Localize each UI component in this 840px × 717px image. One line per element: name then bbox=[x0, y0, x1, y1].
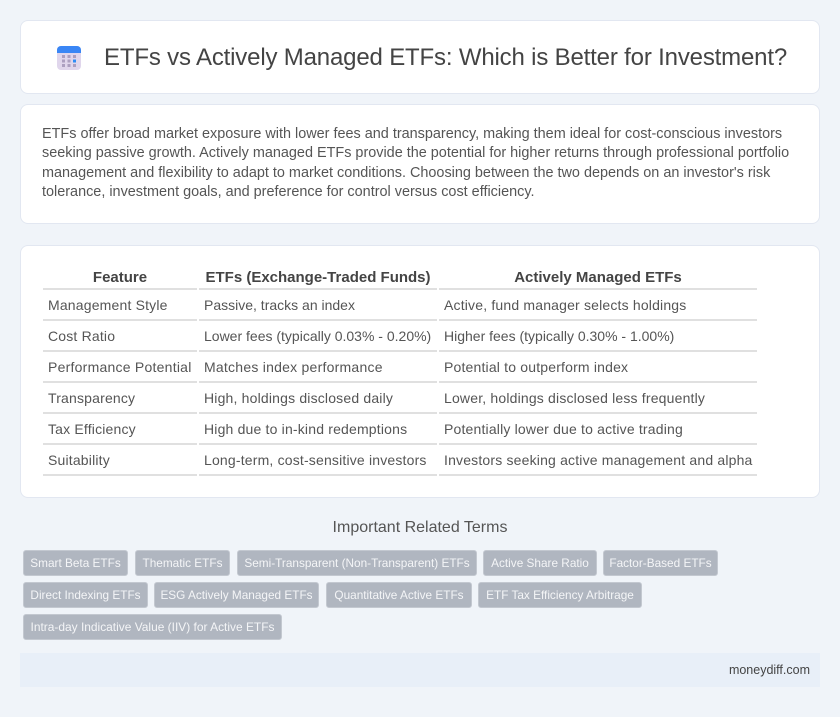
table header row: Actively Managed ETFs bbox=[514, 269, 682, 286]
table header row: Feature bbox=[93, 269, 147, 286]
tag: Quantitative Active ETFs bbox=[334, 588, 464, 602]
tag bbox=[135, 550, 230, 576]
tag bbox=[237, 550, 477, 576]
intro paragraph: management and flexibility to adapt to market conditions. Choosing between the two depends on an investor's risk bbox=[42, 165, 770, 181]
row: management style: Active, fund manager selects holdings bbox=[444, 297, 686, 313]
row: management style bbox=[48, 297, 686, 313]
related terms tags bbox=[23, 550, 718, 640]
icon: calendar bbox=[57, 46, 81, 70]
tag: Semi-Transparent (Non-Transparent) ETFs bbox=[244, 556, 470, 570]
intro text panel bbox=[20, 104, 820, 224]
row: suitability: Suitability bbox=[48, 452, 110, 468]
row: cost ratio: Lower fees (typically 0.03% - 0.20%) bbox=[204, 328, 431, 344]
tag: Direct Indexing ETFs bbox=[30, 588, 141, 602]
tag: ESG Actively Managed ETFs bbox=[160, 588, 313, 602]
intro paragraph: ETFs offer broad market exposure with lower fees and transparency, making them ideal for cost-conscious investors bbox=[42, 126, 782, 142]
header panel bbox=[20, 20, 820, 94]
row: transparency: High, holdings disclosed daily bbox=[204, 390, 393, 406]
tag: Thematic ETFs bbox=[142, 556, 222, 570]
table header row: ETFs (Exchange-Traded Funds) bbox=[205, 269, 431, 286]
tag bbox=[23, 550, 128, 576]
tag bbox=[23, 582, 148, 608]
related terms heading: Important Related Terms bbox=[333, 519, 507, 536]
comparison table panel bbox=[20, 245, 820, 498]
intro paragraph: tolerance, investment goals, and preference for control versus cost efficiency. bbox=[42, 184, 534, 200]
row: transparency: Transparency bbox=[48, 390, 135, 406]
intro paragraph: seeking passive growth. Actively managed ETFs provide the potential for higher returns through professional portfolio bbox=[42, 145, 789, 161]
row: tax efficiency: Tax Efficiency bbox=[48, 421, 136, 437]
row: tax efficiency bbox=[48, 421, 683, 437]
row: cost ratio: Cost Ratio bbox=[48, 328, 115, 344]
footer bar bbox=[20, 653, 820, 687]
row: management style: Passive, tracks an index bbox=[204, 297, 355, 313]
tag bbox=[478, 582, 642, 608]
intro paragraph bbox=[42, 126, 789, 200]
tag bbox=[326, 582, 472, 608]
row: transparency: Lower, holdings disclosed less frequently bbox=[444, 390, 705, 406]
row: performance potential: Potential to outperform index bbox=[444, 359, 628, 375]
tag bbox=[483, 550, 597, 576]
tag: Factor-Based ETFs bbox=[609, 556, 712, 570]
row: cost ratio bbox=[48, 328, 674, 344]
tag bbox=[154, 582, 319, 608]
tag: ETF Tax Efficiency Arbitrage bbox=[486, 588, 634, 602]
row: suitability bbox=[48, 452, 753, 468]
row: performance potential: Matches index performance bbox=[204, 359, 383, 375]
row: performance potential bbox=[48, 359, 628, 375]
row: suitability: Investors seeking active management and alpha bbox=[444, 452, 753, 468]
tag: Smart Beta ETFs bbox=[30, 556, 121, 570]
row: suitability: Long-term, cost-sensitive investors bbox=[204, 452, 427, 468]
row: cost ratio: Higher fees (typically 0.30% - 1.00%) bbox=[444, 328, 674, 344]
tag: Active Share Ratio bbox=[491, 556, 589, 570]
title: ETFs vs Actively Managed ETFs: Which is Better for Investment? bbox=[104, 44, 787, 71]
tag bbox=[23, 614, 282, 640]
row: performance potential: Performance Potential bbox=[48, 359, 192, 375]
row: transparency bbox=[48, 390, 705, 406]
tag: Intra-day Indicative Value (IIV) for Active ETFs bbox=[31, 620, 274, 634]
tag bbox=[603, 550, 718, 576]
table header row bbox=[93, 269, 682, 286]
row: management style: Management Style bbox=[48, 297, 168, 313]
row: tax efficiency: High due to in-kind redemptions bbox=[204, 421, 407, 437]
comparison table bbox=[43, 269, 757, 476]
row: tax efficiency: Potentially lower due to active trading bbox=[444, 421, 683, 437]
footer site name: moneydiff.com bbox=[729, 663, 810, 677]
